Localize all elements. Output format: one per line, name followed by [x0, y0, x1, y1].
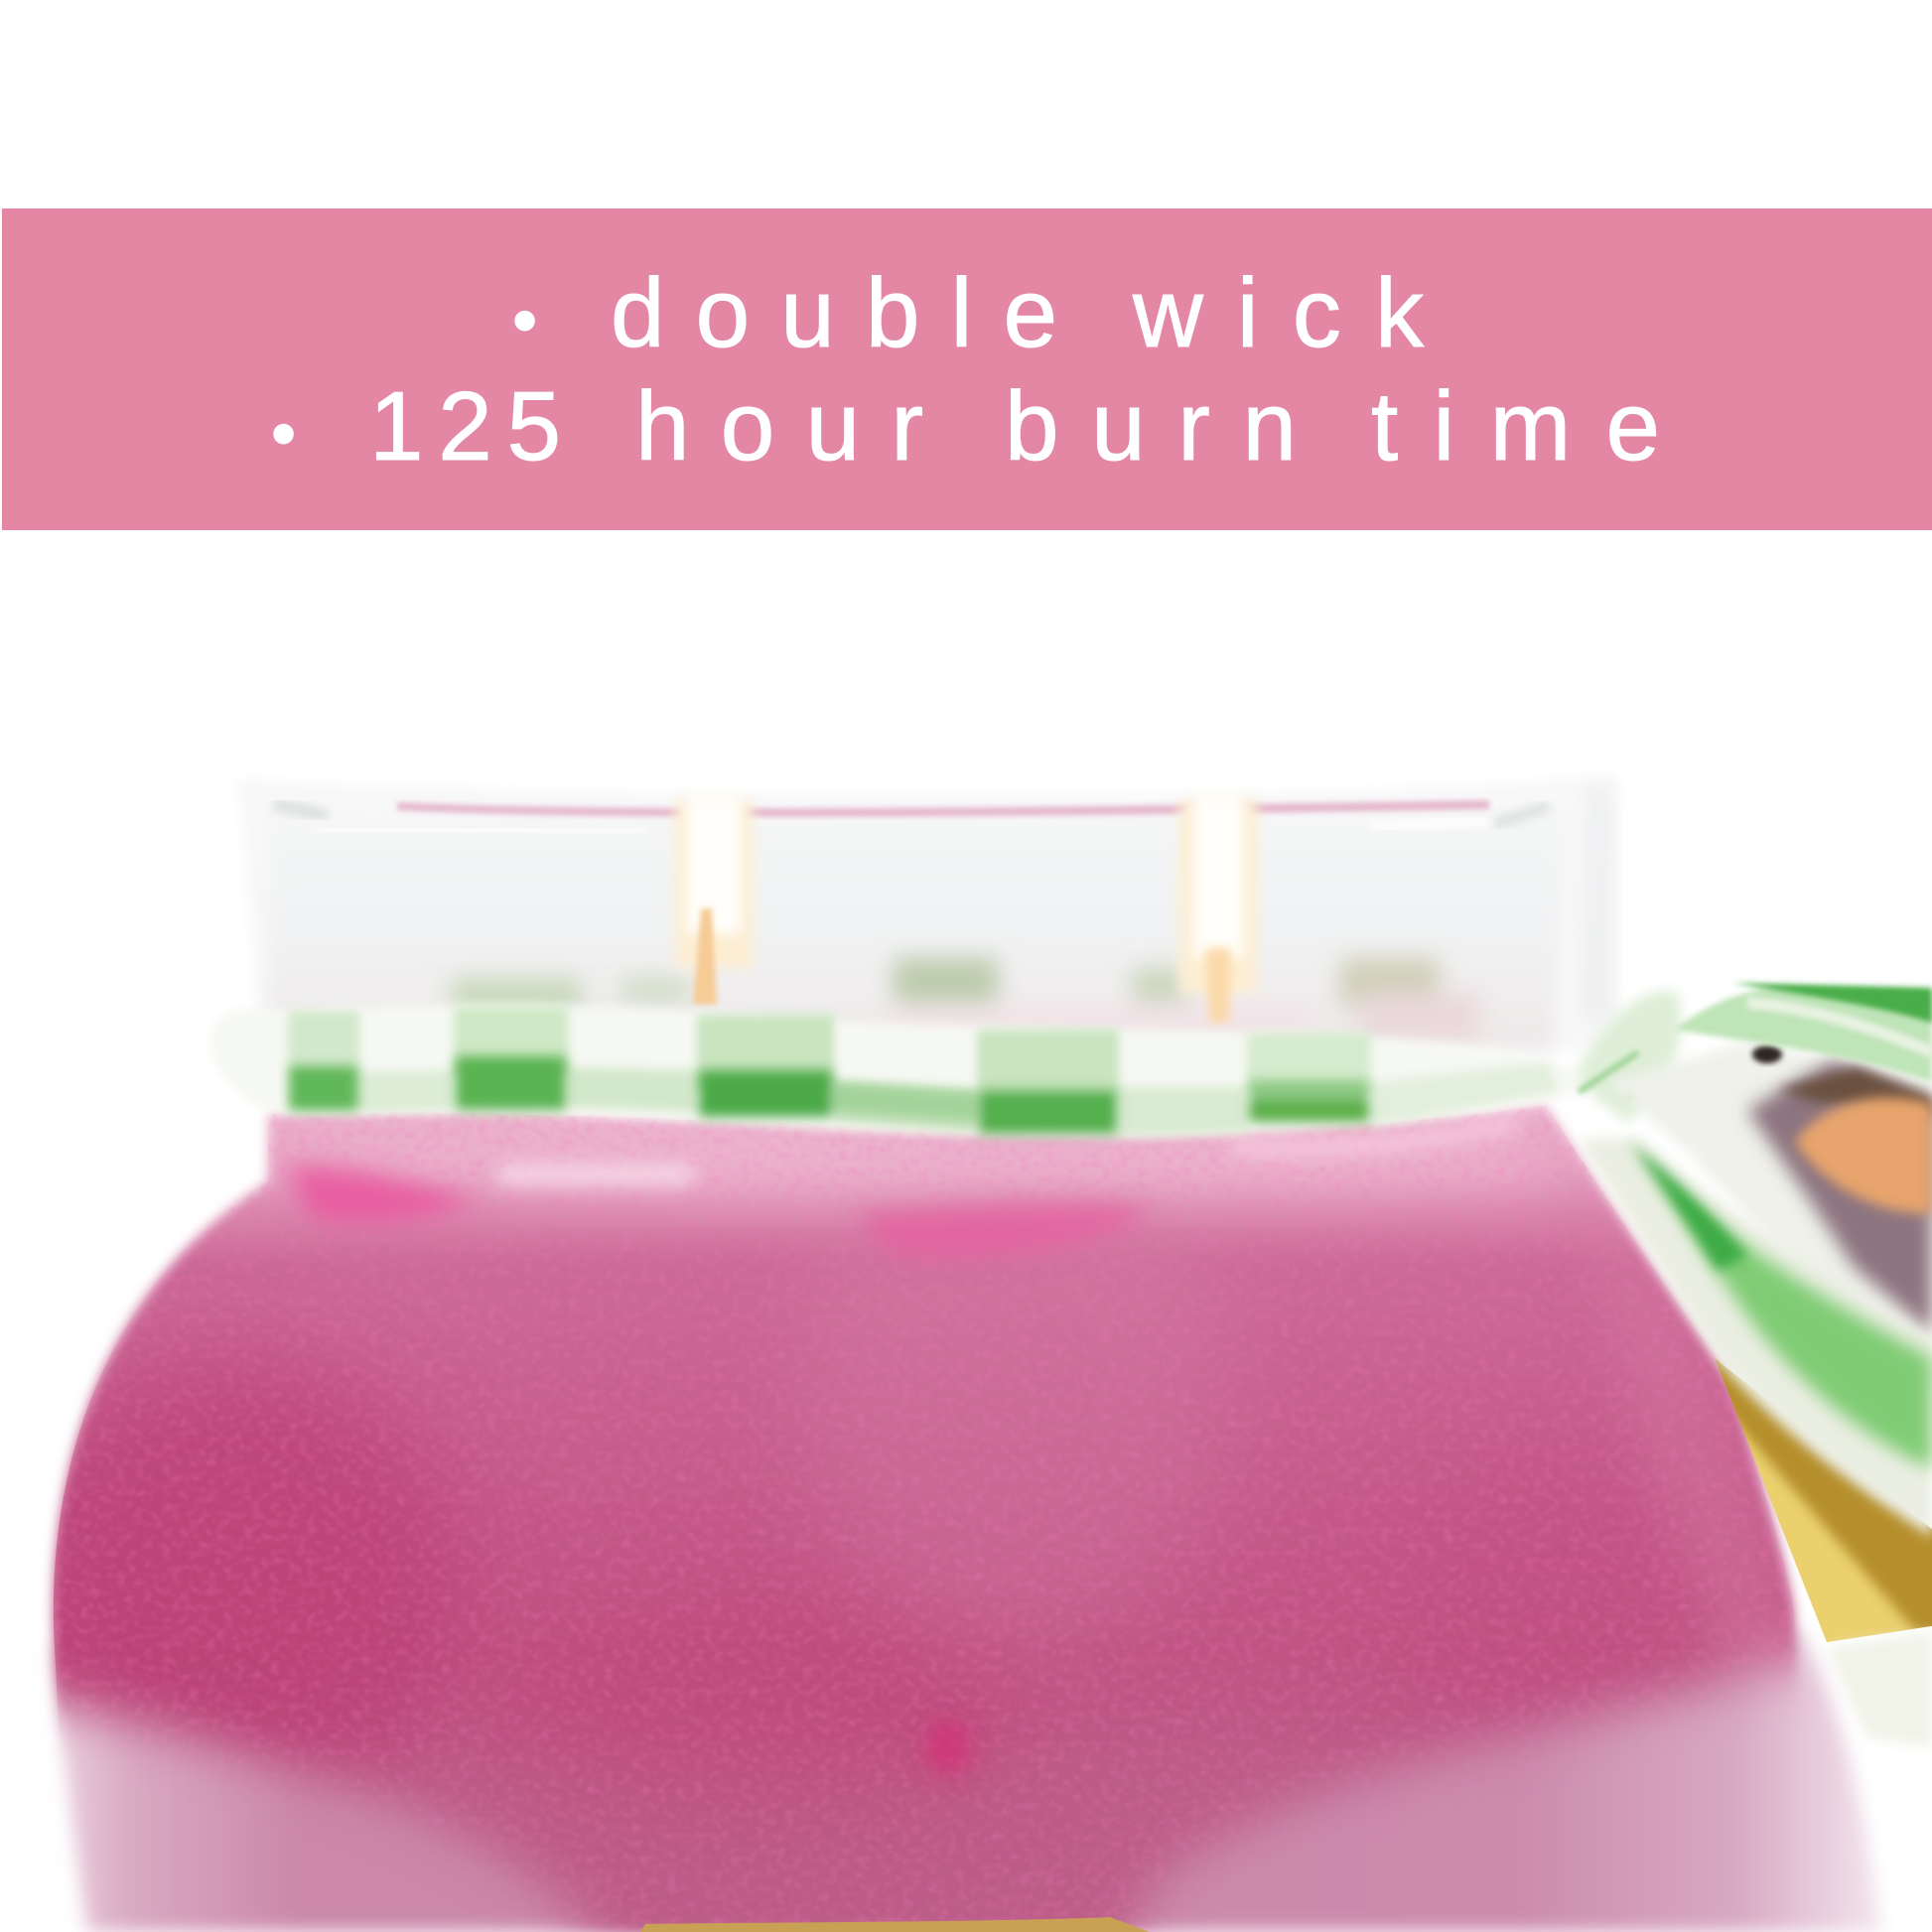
gingham ribbon — [210, 991, 1688, 1138]
banner text: 125 hour burn time: burn — [1005, 371, 1297, 481]
yellow label panel — [1715, 1358, 1932, 1642]
banner text: 125 hour burn time: time — [1371, 371, 1660, 481]
magenta blotches — [288, 1166, 1152, 1775]
candle jar photo — [0, 774, 1932, 1932]
upper ribbon tail — [1675, 988, 1932, 1082]
banner text: 125 hour burn time: hour — [635, 371, 923, 481]
ribbon light checks — [288, 1007, 1559, 1137]
green ribbon reflections in glass — [452, 958, 1479, 1042]
ribbon knot — [1579, 991, 1681, 1122]
gold front label edge — [640, 1917, 1150, 1932]
flame: right wick — [1179, 794, 1257, 1023]
pink wax body — [0, 1102, 1827, 1932]
banner text: double wick: wick — [1132, 258, 1425, 367]
banner text: double wick: • — [512, 281, 537, 360]
pale lower jar — [50, 1628, 1881, 1932]
flame: left wick — [675, 794, 753, 1005]
wax shading — [0, 1105, 1817, 1817]
banner text: 125 hour burn time: • — [271, 394, 296, 474]
label photo — [1747, 1045, 1932, 1333]
lower ribbon tail — [1579, 1137, 1932, 1537]
ribbon tails and label on right — [1579, 983, 1932, 1747]
banner text: 125 hour burn time: 125 — [369, 371, 561, 481]
wax grain — [40, 1102, 1827, 1932]
banner text: double wick: double — [611, 258, 1057, 367]
cream lower fold — [1827, 1632, 1932, 1747]
cream label — [1608, 1042, 1932, 1390]
wax highlights — [496, 1122, 1519, 1185]
glass jar top — [238, 774, 1616, 1052]
banner — [2, 208, 1932, 530]
ribbon dark checks — [290, 1056, 1369, 1134]
